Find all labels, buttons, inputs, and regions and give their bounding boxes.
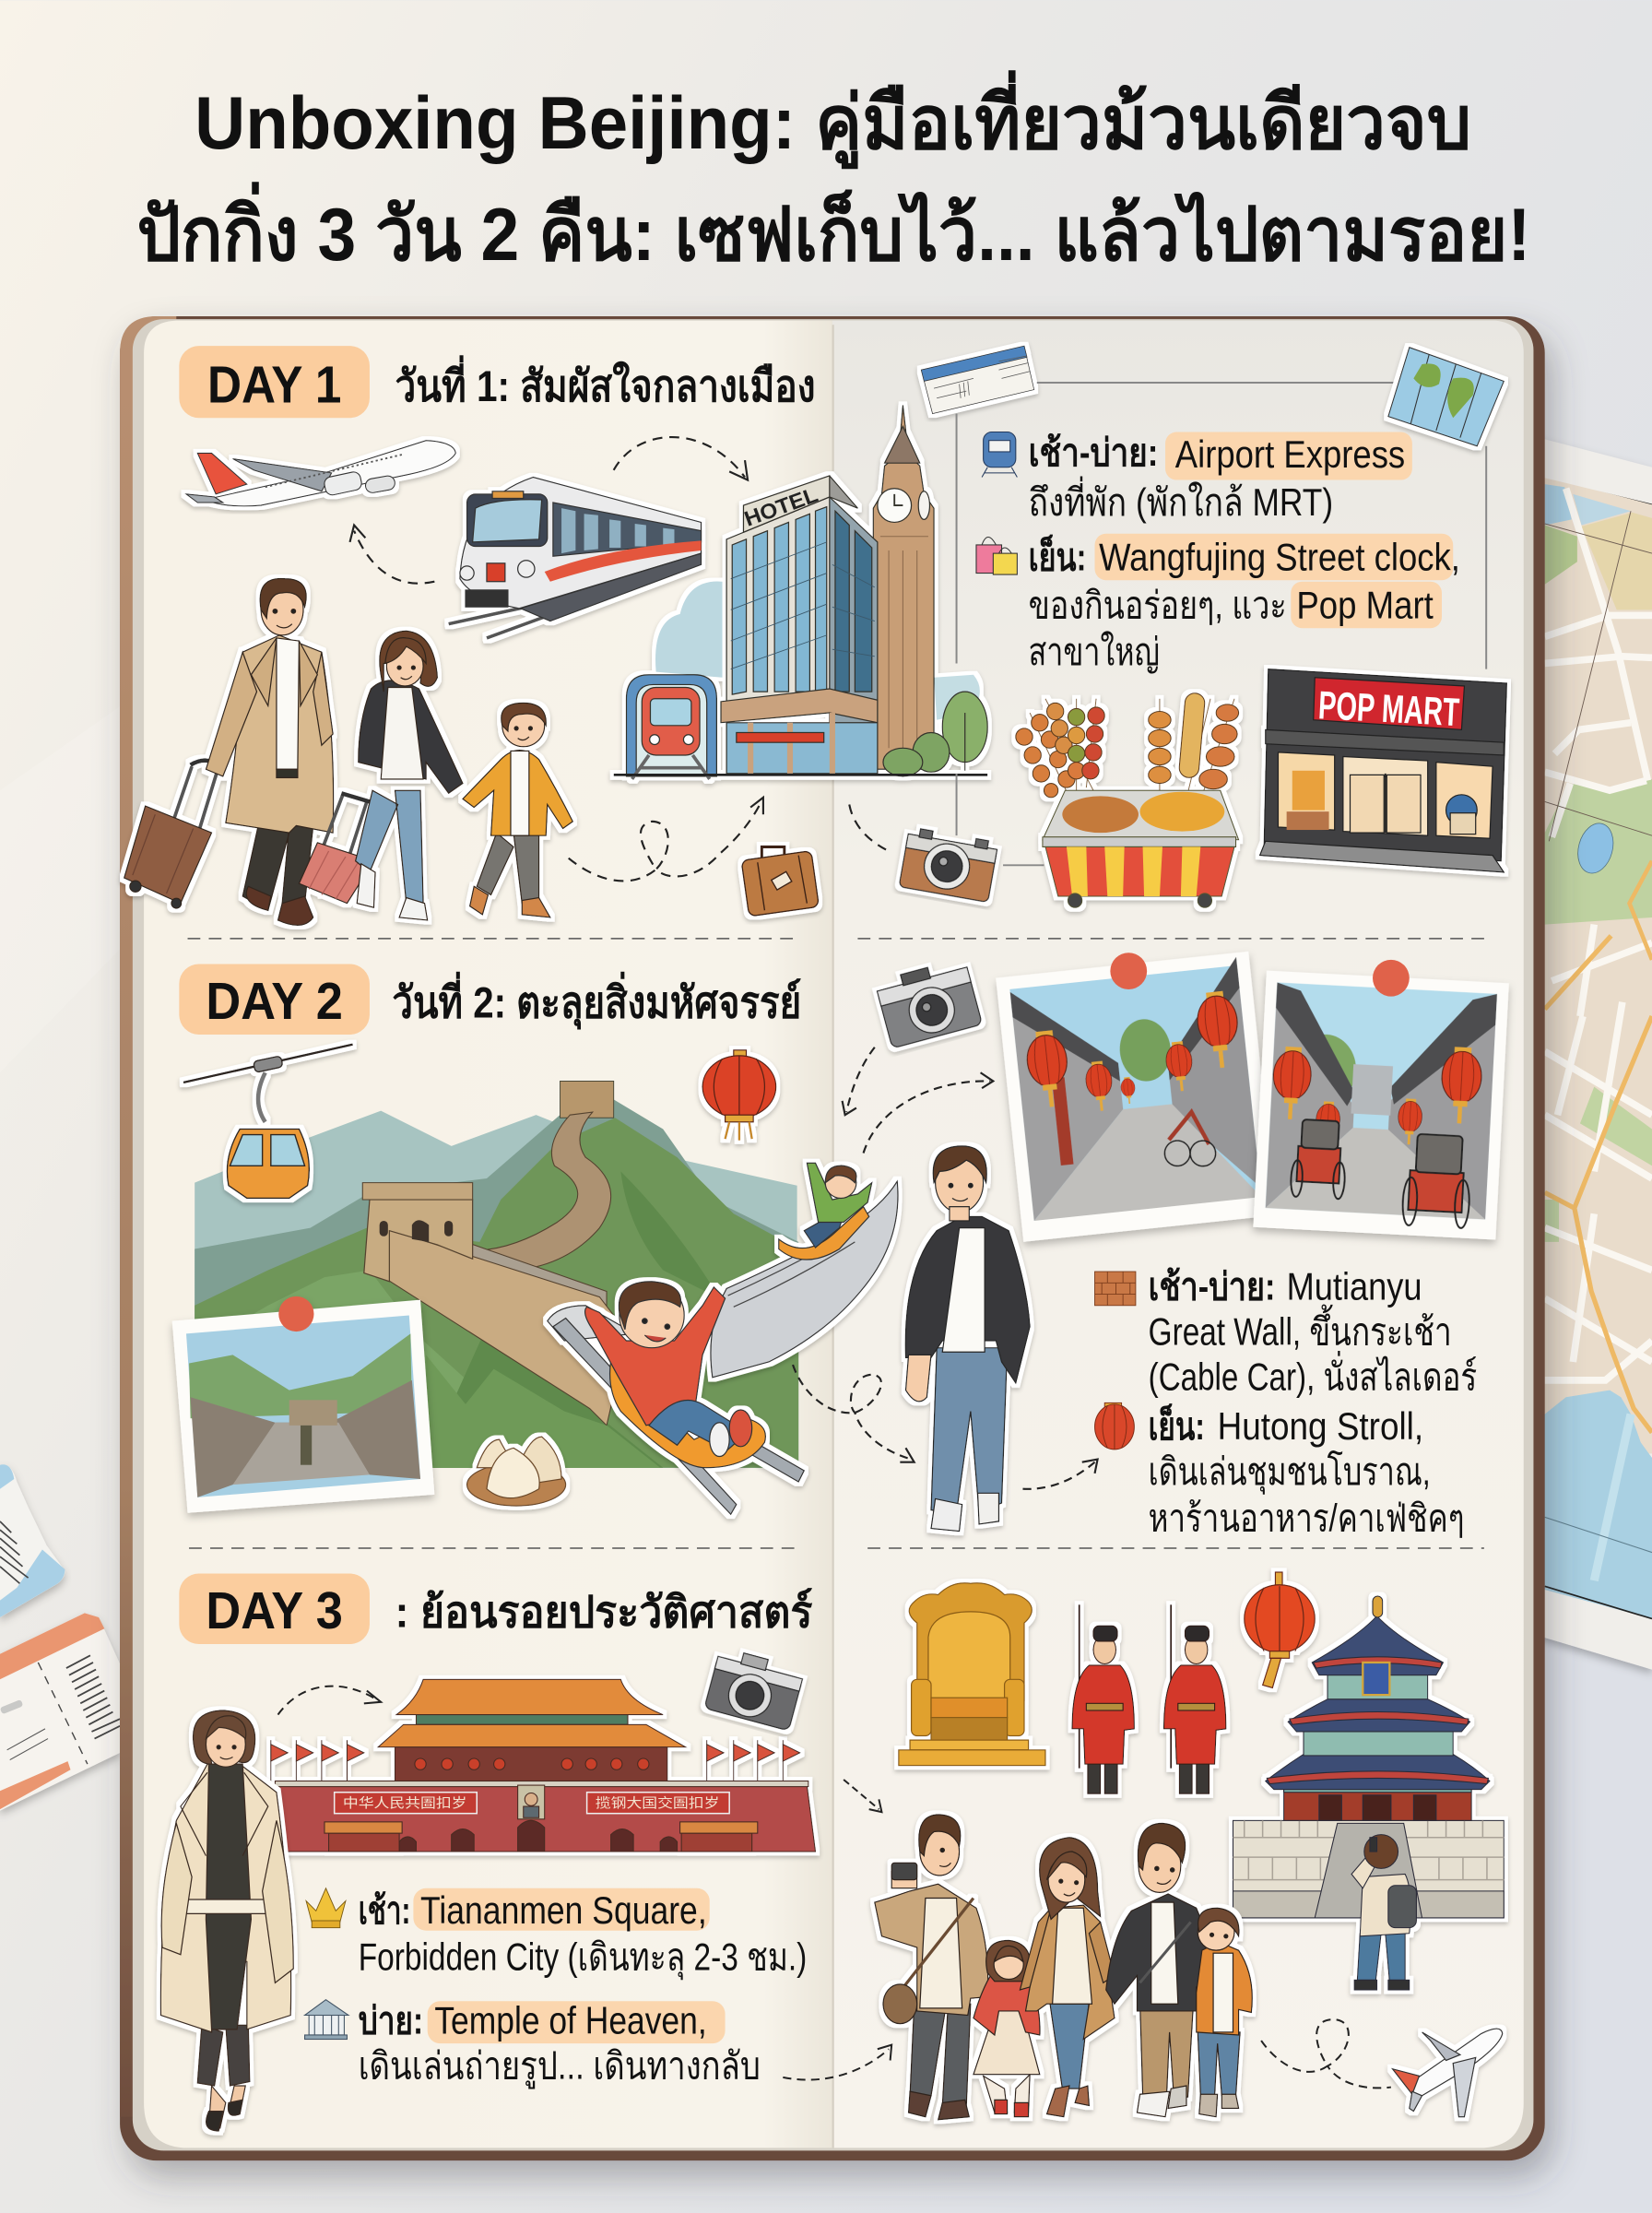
flags [271, 1740, 800, 1784]
day 3 heading [179, 1574, 813, 1644]
day 2 schedule text: หาร้านอาหาร/คาเฟ่ชิคๆ [1149, 1497, 1464, 1540]
title: ปักกิ่ง 3 วัน 2 คืน: เซฟเก็บไว้... แล้วไปตามรอย! [136, 182, 1530, 277]
red pin [278, 1296, 313, 1331]
icon: brick wall [1095, 1272, 1136, 1306]
Tiananmen gate sticker: 中华人民共圄扣岁 [343, 1793, 467, 1813]
big boy [585, 1287, 726, 1426]
day 3 schedule text: Forbidden City (เดินทะลุ 2-3 ชม.) [359, 1936, 807, 1981]
woman in belted trench coat sticker [160, 1710, 293, 2131]
title [136, 70, 1530, 277]
food cart with skewers sticker [1016, 692, 1239, 907]
upper watchtower [560, 1081, 614, 1118]
right page [832, 321, 1524, 2148]
station and hotel with clock tower sticker [614, 405, 987, 779]
marble terrace [1233, 1820, 1504, 1918]
father in black jacket [1106, 1823, 1213, 2117]
left page [144, 321, 832, 2148]
green hills [195, 1118, 798, 1468]
train sticker [449, 477, 702, 638]
man with camera [875, 1815, 988, 2120]
guard right [1164, 1604, 1226, 1793]
day 3 schedule text [305, 1888, 807, 2089]
woman in leather jacket [356, 631, 463, 920]
brown suitcase [124, 761, 221, 908]
day 3 schedule text: Temple of Heaven, [434, 1999, 707, 2041]
boarding pass: blue, on desk [0, 1464, 65, 1617]
slide rails [548, 1306, 635, 1341]
looping dashed line to plane [1261, 2019, 1391, 2088]
day 1 schedule text: Airport Express [1175, 433, 1405, 476]
clock tower [873, 405, 934, 769]
camera sticker: brown [899, 827, 998, 903]
day 3 heading: DAY 3 [206, 1581, 343, 1639]
sign: right [587, 1793, 729, 1814]
day 2 schedule text: Hutong Stroll, [1218, 1405, 1423, 1448]
gate columns [395, 1747, 667, 1781]
day 1 schedule text: เย็น: [1029, 533, 1086, 578]
camera sticker: grey, tilted [875, 957, 983, 1048]
icon: train [982, 432, 1017, 477]
trees in front of wall [426, 1355, 660, 1468]
day 1 heading [179, 346, 816, 418]
train-to-hotel dashed arrow [614, 437, 748, 480]
Temple of Heaven sticker with photographer [1233, 1596, 1504, 1990]
day 1 schedule text: เช้า-บ่าย: [1029, 432, 1158, 474]
temple lower roof [1266, 1754, 1490, 1790]
temple upper drum [1328, 1674, 1428, 1699]
day 2 schedule text [1095, 1266, 1477, 1540]
day 3 heading: : ย้อนรอยประวัติศาสตร์ [395, 1588, 813, 1638]
day 3 schedule text: เช้า: [359, 1889, 410, 1932]
cloud [655, 581, 723, 678]
guard left [1072, 1604, 1134, 1793]
red pin, right hutong photo [1373, 960, 1410, 997]
slide with two children sticker [548, 1163, 898, 1514]
icon: shopping bags [976, 538, 1017, 574]
day 2 schedule text: เช้า-บ่าย: [1149, 1266, 1275, 1308]
arches and kiosks [399, 1820, 678, 1852]
looping dashed arrow to station [569, 798, 763, 881]
big sled [610, 1360, 765, 1468]
day 1 heading: DAY 1 [207, 355, 341, 413]
Great Wall polaroid [172, 1296, 434, 1513]
tree and bushes [883, 692, 987, 776]
dashed arrows around the hutong photos [793, 1047, 1098, 1489]
day 2 schedule text: เย็น: [1149, 1402, 1205, 1448]
golden throne sticker [899, 1583, 1045, 1766]
main wall face [388, 1229, 628, 1426]
small brown suitcase sticker [741, 846, 819, 917]
Pop Mart storefront sticker: POP MART [1317, 683, 1460, 735]
mid mountains [195, 1087, 798, 1468]
striped cart base [1045, 846, 1234, 896]
red pin, left hutong photo [1110, 953, 1147, 989]
fried food tray [1043, 790, 1239, 840]
icon: classical temple [305, 2000, 348, 2040]
girl in red cardigan [974, 1940, 1040, 2117]
city map sheet behind the notebook [1545, 439, 1652, 1676]
Great Wall landscape [195, 1081, 798, 1468]
icon: crown [306, 1888, 346, 1928]
day 2 heading [179, 964, 801, 1035]
family with luggage [124, 578, 572, 925]
day 1 heading: วันที่ 1: สัมผัสใจกลางเมือง [395, 355, 816, 411]
hutong polaroid with bicycle [996, 952, 1276, 1242]
temple lower drum [1284, 1781, 1471, 1820]
boarding pass sticker [921, 346, 1034, 414]
short dashed arrow from left page [844, 1780, 881, 1812]
lower roof [378, 1724, 686, 1747]
winding wall [477, 1112, 611, 1271]
mother in camel coat [1020, 1838, 1115, 2117]
day 3 schedule text: เดินเล่นถ่ายรูป... เดินทางกลับ [359, 2044, 761, 2089]
hanging lantern sticker [1245, 1572, 1315, 1687]
dashed arrow to the gate [277, 1686, 381, 1715]
icon: lantern [1095, 1402, 1134, 1450]
plane sticker [186, 441, 455, 506]
pink suitcase [299, 793, 374, 904]
upper roof [396, 1679, 663, 1715]
day 1 schedule text: ถึงที่พัก (พักใกล้ MRT) [1029, 476, 1333, 524]
day 2 heading: วันที่ 2: ตะลุยสิ่งมหัศจรรย์ [392, 972, 801, 1030]
temple middle roof [1288, 1699, 1470, 1732]
day 1 schedule text [976, 432, 1460, 673]
day 2 schedule text: Mutianyu [1287, 1266, 1422, 1308]
portrait [518, 1785, 545, 1819]
man in trench coat [206, 578, 334, 925]
boy in orange jacket [463, 703, 572, 917]
boy in orange jacket [1197, 1908, 1252, 2117]
open notebook [120, 316, 1545, 2160]
family of five sticker [875, 1815, 1252, 2120]
station arch with red train [626, 675, 716, 779]
boarding pass: orange, on desk [0, 1613, 120, 1811]
far mountains [195, 1111, 797, 1468]
camera sticker: grey, near gate [704, 1647, 805, 1731]
airport-to-train dashed arrow [350, 526, 434, 584]
day 2 schedule text: เดินเล่นชุมชนโบราณ, [1149, 1450, 1431, 1495]
Tiananmen gate sticker [268, 1679, 816, 1852]
sign: left [335, 1793, 477, 1814]
photographer [1351, 1835, 1416, 1990]
hotel building [721, 476, 878, 774]
map sticker [1388, 348, 1504, 446]
day 1 schedule text: ของกินอร่อยๆ, แวะ [1029, 585, 1287, 627]
dashed arrow to family [783, 2045, 891, 2080]
temple middle drum [1304, 1727, 1453, 1756]
cable car sticker [183, 1045, 353, 1198]
wall walkway [409, 1228, 607, 1312]
day 3 schedule text: Tiananmen Square, [420, 1889, 707, 1932]
day 1 schedule text: Pop Mart [1296, 585, 1434, 627]
young man in leather jacket sticker [905, 1146, 1030, 1532]
notebook cover [120, 316, 1545, 2160]
day 1 schedule text: Wangfujing Street clock, [1099, 536, 1460, 578]
skewers [1016, 692, 1239, 805]
slide chute swoosh [711, 1181, 898, 1378]
page stack [133, 319, 1533, 2150]
section dividers [188, 939, 1490, 1548]
main watchtower [364, 1200, 473, 1282]
soup dumplings sticker [467, 1437, 566, 1506]
red wall [268, 1785, 816, 1852]
red lantern sticker [702, 1050, 776, 1141]
Tiananmen gate sticker: 揽钢大国交圄扣岁 [596, 1793, 719, 1813]
temple top roof [1312, 1615, 1444, 1675]
day 1 note outline [957, 383, 1486, 865]
departing plane sticker [1392, 2029, 1503, 2117]
day 2 schedule text: Great Wall, ขึ้นกระเช้า [1149, 1305, 1452, 1354]
two imperial guards sticker [1072, 1604, 1226, 1793]
day 1 schedule text: สาขาใหญ่ [1029, 630, 1160, 673]
Pop Mart storefront sticker [1260, 669, 1506, 872]
hutong polaroid with rickshaws [1253, 971, 1509, 1240]
small sled and kid [779, 1207, 869, 1260]
day 2 schedule text: (Cable Car), นั่งสไลเดอร์ [1149, 1351, 1477, 1399]
dashed arrow to camera [849, 805, 886, 849]
day 2 heading: DAY 2 [206, 972, 343, 1030]
day 3 schedule text: บ่าย: [359, 1999, 423, 2041]
title: Unboxing Beijing: คู่มือเที่ยวม้วนเดียวจบ [195, 70, 1471, 170]
hotel building: HOTEL [741, 482, 820, 531]
